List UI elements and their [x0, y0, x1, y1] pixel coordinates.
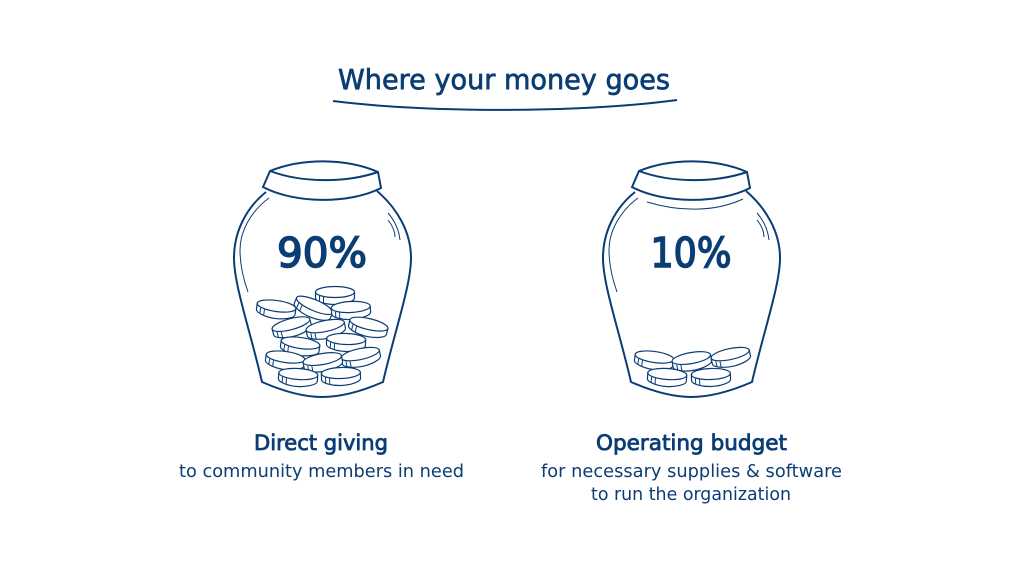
description: direct giving: to community members in need [179, 461, 464, 482]
heading: operating budget: Operating budget [596, 431, 787, 455]
icon: jar with few coins [603, 161, 780, 397]
title [333, 64, 677, 110]
icon: jar with many coins [234, 161, 411, 397]
percentage: 10%: 10% [650, 229, 732, 277]
description: operating budget: to run the organization [591, 484, 791, 505]
heading: direct giving: Direct giving [254, 431, 388, 455]
title: Where your money goes [338, 64, 670, 96]
panel: direct giving [179, 161, 464, 482]
panel: operating budget [541, 161, 842, 505]
percentage: 90%: 90% [277, 229, 367, 277]
description: operating budget: for necessary supplies & software [541, 461, 842, 482]
description: operating budget [541, 461, 842, 505]
